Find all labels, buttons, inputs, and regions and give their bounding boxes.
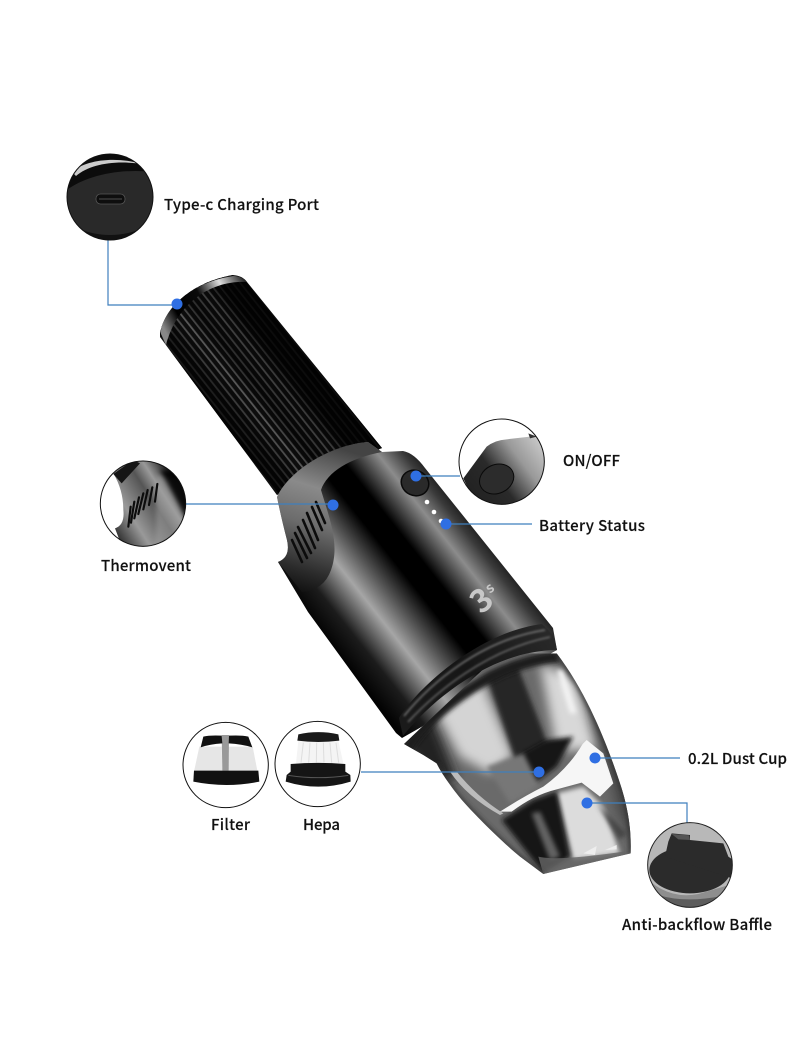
marker dot (590, 752, 600, 764)
leader line (108, 240, 177, 305)
power button (397, 466, 433, 500)
leader line (361, 771, 539, 773)
icon: baffle inset (645, 823, 735, 910)
callout: filter (183, 722, 268, 835)
callout: anti-backflow baffle (582, 798, 772, 935)
icon: filter inset (183, 722, 268, 808)
label: Type-c Charging Port (164, 194, 319, 215)
main body (277, 442, 557, 738)
label: Filter (211, 814, 251, 835)
locking ring (399, 624, 557, 736)
ribbed handle (160, 275, 382, 495)
vacuum cleaner product (140, 260, 640, 880)
callout: on/off button (410, 419, 620, 507)
marker dot (328, 500, 338, 510)
icon: thermovent inset (100, 460, 190, 550)
icon: hepa inset (275, 721, 360, 807)
leader line (587, 803, 687, 823)
callout: thermovent (100, 460, 338, 576)
marker dot (582, 798, 592, 808)
leader line (416, 475, 460, 477)
callout: type-c charging port (67, 150, 319, 310)
label: 0.2L Dust Cup (688, 748, 787, 769)
thermal vent housing (277, 442, 382, 592)
brand logo: s (481, 578, 498, 598)
icon: type-c inset (67, 150, 153, 240)
battery status LEDs (425, 500, 443, 523)
label: Anti-backflow Baffle (622, 914, 772, 935)
label: Thermovent (101, 555, 191, 576)
leader line (186, 503, 333, 505)
callout: hepa filter (275, 721, 544, 835)
marker dot (440, 518, 452, 530)
label: Battery Status (539, 515, 645, 536)
leader line (446, 523, 532, 525)
brand logo: 3 (459, 575, 502, 623)
transparent dust cup (404, 653, 631, 874)
label: Hepa (303, 814, 340, 835)
icon: power button inset (459, 419, 547, 507)
callout: battery status (440, 515, 645, 536)
callout: dust cup (590, 748, 787, 769)
label: ON/OFF (563, 450, 620, 471)
leader line (595, 757, 680, 759)
marker dot (172, 298, 182, 310)
infographic canvas (66, 154, 786, 930)
marker dot (534, 766, 544, 778)
marker dot (410, 470, 422, 482)
